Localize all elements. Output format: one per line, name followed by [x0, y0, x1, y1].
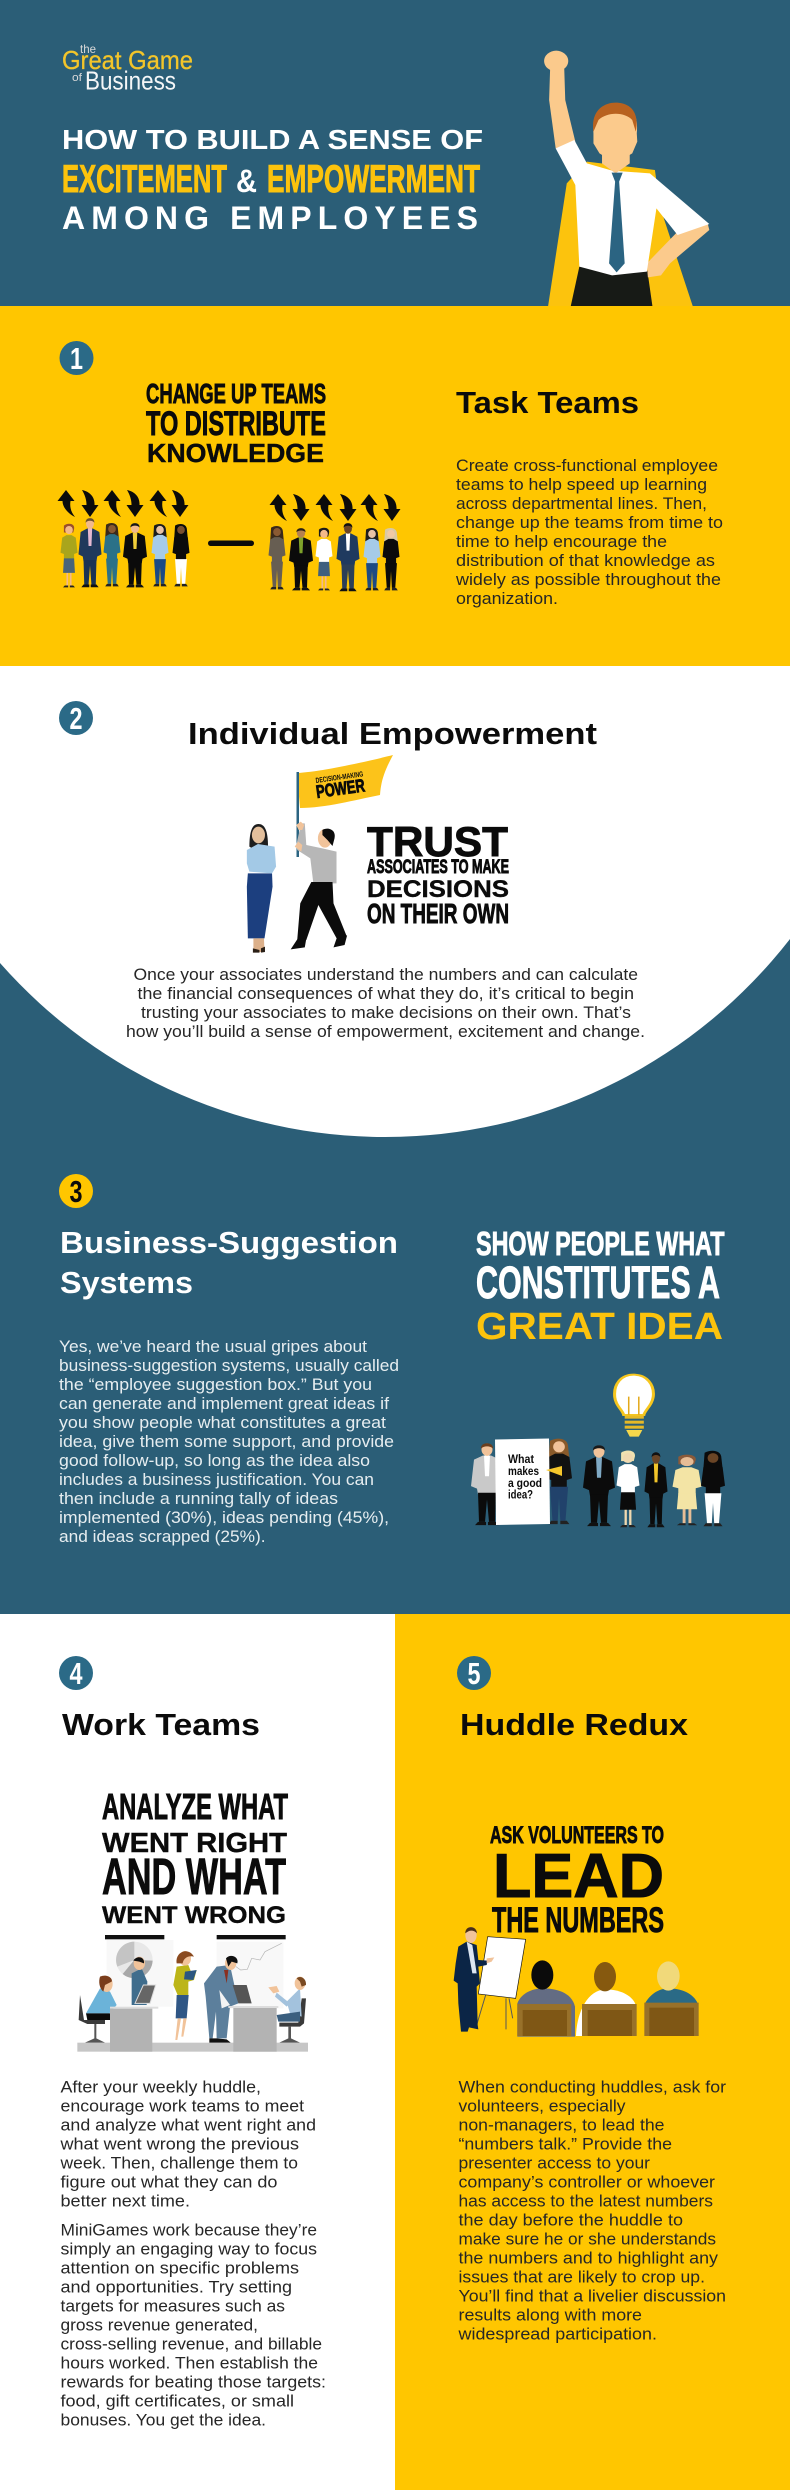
body text — [126, 966, 645, 1041]
group of five colleagues — [583, 1445, 725, 1527]
title: HOW TO BUILD A SENSE OF — [62, 124, 483, 155]
body text: volunteers, especially — [458, 2098, 626, 2116]
logo — [62, 42, 193, 96]
graphic heading — [476, 1225, 724, 1348]
body text: paragraph 2: simply an engaging way to focus — [60, 2241, 317, 2259]
graphic heading: TO DISTRIBUTE — [146, 405, 326, 443]
body text: paragraph 1: better next time. — [60, 2192, 190, 2210]
title: EXCITEMENT — [62, 158, 227, 201]
number badge 2: 2 — [70, 701, 82, 736]
logo: Business — [85, 66, 176, 96]
body text: paragraph 1: and analyze what went right and — [60, 2116, 316, 2134]
body text: time to help encourage the — [456, 533, 667, 551]
panel: work teams — [0, 1614, 395, 2490]
graphic heading: trust: TRUST — [367, 818, 508, 865]
graphic heading: WENT WRONG — [102, 1902, 286, 1929]
title — [62, 124, 483, 236]
graphic heading: AND WHAT — [102, 1848, 286, 1905]
body text: presenter access to your — [458, 2154, 651, 2172]
body text: how you’ll build a sense of empowerment, excitement and change. — [126, 1023, 645, 1041]
body text: teams to help speed up learning — [456, 476, 707, 494]
body text: and ideas scrapped (25%). — [59, 1528, 266, 1546]
body text: Create cross-functional employee — [456, 457, 718, 475]
graphic heading: trust: ON THEIR OWN — [367, 898, 509, 929]
body text: When conducting huddles, ask for — [458, 2078, 727, 2096]
body text: Once your associates understand the numbers and can calculate — [134, 966, 638, 984]
body text: paragraph 2: bonuses. You get the idea. — [60, 2412, 266, 2430]
body text: paragraph 2: gross revenue generated, — [60, 2317, 258, 2335]
graphic heading: trust: DECISIONS — [367, 876, 509, 903]
body text: widespread participation. — [457, 2326, 657, 2344]
body text: results along with more — [458, 2306, 642, 2324]
illustration: presenter and audience — [454, 1927, 699, 2037]
graphic heading: WENT RIGHT — [102, 1827, 287, 1858]
body text: business-suggestion systems, usually called — [59, 1357, 399, 1375]
body text: paragraph 2: cross-selling revenue, and billable — [60, 2336, 322, 2354]
panel: business-suggestion systems — [0, 900, 790, 1614]
heading: huddle redux: Huddle Redux — [460, 1707, 689, 1742]
body text: then include a running tally of ideas — [59, 1490, 338, 1508]
body text: paragraph 1: week. Then, challenge them to — [59, 2154, 298, 2172]
icon: decision-making power flag: POWER — [315, 775, 366, 802]
body text: Yes, we’ve heard the usual gripes about — [59, 1338, 367, 1356]
body text: distribution of that knowledge as — [456, 552, 715, 570]
body text: “numbers talk.” Provide the — [458, 2136, 672, 2154]
graphic heading: LEAD — [493, 1842, 664, 1911]
graphic heading: ANALYZE WHAT — [102, 1786, 288, 1827]
group with sign: what makes a good idea: a good — [508, 1476, 542, 1490]
body text: can generate and implement great ideas if — [59, 1395, 389, 1413]
body text: paragraph 2: and opportunities. Try setting — [60, 2279, 292, 2297]
body text: implemented (30%), ideas pending (45%), — [59, 1509, 389, 1527]
number badge 2 — [59, 701, 93, 736]
team arrows and people left — [58, 490, 190, 587]
graphic heading — [490, 1822, 664, 1940]
graphic heading — [102, 1786, 288, 1929]
panel: huddle redux — [395, 1614, 790, 2490]
group with sign: what makes a good idea — [471, 1438, 572, 1525]
logo: the — [80, 42, 96, 56]
panel: header — [0, 0, 790, 306]
body text: paragraph 1: After your weekly huddle, — [60, 2078, 261, 2096]
title: EMPOWERMENT — [267, 158, 480, 201]
panel: task teams — [0, 306, 790, 666]
body text: trusting your associates to make decisions on their own. That’s — [141, 1004, 631, 1022]
body text: paragraph 1: encourage work teams to meet — [60, 2098, 304, 2116]
body text — [455, 457, 723, 608]
illustration: office meeting — [77, 1935, 308, 2052]
body text: paragraph 2: rewards for beating those targets: — [60, 2374, 326, 2392]
heading: work teams: Work Teams — [62, 1707, 260, 1742]
body text: paragraph 2: targets for measures such as — [60, 2298, 285, 2316]
body text: organization. — [456, 590, 558, 608]
graphic heading — [146, 378, 326, 468]
body text: paragraph 1: what went wrong the previous — [59, 2136, 299, 2154]
group with sign: what makes a good idea: idea? — [508, 1488, 533, 1502]
icon: decision-making power flag: DECISION-MAKING — [315, 769, 364, 785]
figures: woman and man holding flag — [247, 822, 347, 953]
graphic heading: THE NUMBERS — [492, 1901, 664, 1940]
body text: paragraph 2 — [60, 2222, 326, 2430]
body text: includes a business justification. You can — [59, 1471, 374, 1489]
body text: paragraph 1 — [59, 2078, 316, 2210]
body text: paragraph 2: food, gift certificates, or small — [60, 2393, 294, 2411]
icon: superhero businessman — [544, 51, 709, 306]
logo: Great Game — [62, 45, 193, 75]
team arrows and people right — [268, 494, 400, 591]
body text: the financial consequences of what they do, it’s critical to begin — [138, 985, 634, 1003]
number badge 5 — [457, 1656, 491, 1691]
body text: the day before the huddle to — [458, 2212, 683, 2230]
heading: individual empowerment: Individual Empowerment — [188, 716, 597, 751]
title: AMONG EMPLOYEES — [62, 200, 478, 236]
icon: light bulb — [615, 1375, 653, 1437]
body text: paragraph 2: MiniGames work because they’re — [60, 2222, 317, 2240]
number badge 4 — [59, 1656, 93, 1691]
graphic heading: GREAT IDEA — [476, 1306, 723, 1348]
heading: business-suggestion systems: Systems — [60, 1265, 193, 1300]
heading: business-suggestion systems — [60, 1225, 398, 1300]
title: & — [236, 163, 257, 199]
logo: of — [72, 72, 83, 84]
graphic heading: KNOWLEDGE — [147, 438, 324, 468]
body text: good follow-up, so long as the idea also — [59, 1452, 370, 1470]
group with sign: what makes a good idea: makes — [508, 1464, 539, 1478]
dash between teams — [208, 540, 254, 546]
body text: paragraph 1: figure out what they can do — [60, 2174, 278, 2192]
icon: decision-making power flag — [296, 755, 393, 857]
group with sign: what makes a good idea: What — [508, 1452, 534, 1466]
body text: the numbers and to highlight any — [458, 2250, 719, 2268]
body text: the “employee suggestion box.” But you — [59, 1376, 372, 1394]
number badge 5: 5 — [468, 1656, 480, 1691]
body text: company’s controller or whoever — [458, 2174, 716, 2192]
graphic heading: trust: ASSOCIATES TO MAKE — [367, 857, 509, 878]
number badge 3: 3 — [70, 1174, 82, 1209]
body text: make sure he or she understands — [458, 2230, 716, 2248]
body text: You’ll find that a livelier discussion — [458, 2288, 726, 2306]
number badge 4: 4 — [70, 1656, 83, 1691]
body text: non-managers, to lead the — [458, 2116, 664, 2134]
heading: business-suggestion systems: Business-Suggestion — [60, 1225, 398, 1260]
number badge 3 — [59, 1174, 93, 1209]
body text: across departmental lines. Then, — [456, 495, 707, 513]
body text: you show people what constitutes a great — [59, 1414, 386, 1432]
body text: idea, give them some support, and provide — [59, 1433, 394, 1451]
graphic heading: CHANGE UP TEAMS — [146, 378, 326, 409]
body text: paragraph 2: hours worked. Then establish the — [60, 2355, 318, 2373]
body text: change up the teams from time to — [456, 514, 723, 532]
graphic heading: ASK VOLUNTEERS TO — [490, 1822, 664, 1849]
body text — [457, 2078, 727, 2344]
number badge 1: 1 — [70, 341, 83, 376]
body text: has access to the latest numbers — [458, 2192, 713, 2210]
number badge 1 — [60, 341, 94, 376]
panel: individual empowerment — [0, 666, 790, 1137]
body text — [59, 1338, 399, 1546]
graphic heading: trust — [367, 818, 509, 929]
body text: paragraph 2: attention on specific problems — [60, 2260, 299, 2278]
body text: widely as possible throughout the — [455, 571, 721, 589]
body text: issues that are likely to crop up. — [458, 2268, 705, 2286]
heading: task teams: Task Teams — [456, 385, 639, 420]
